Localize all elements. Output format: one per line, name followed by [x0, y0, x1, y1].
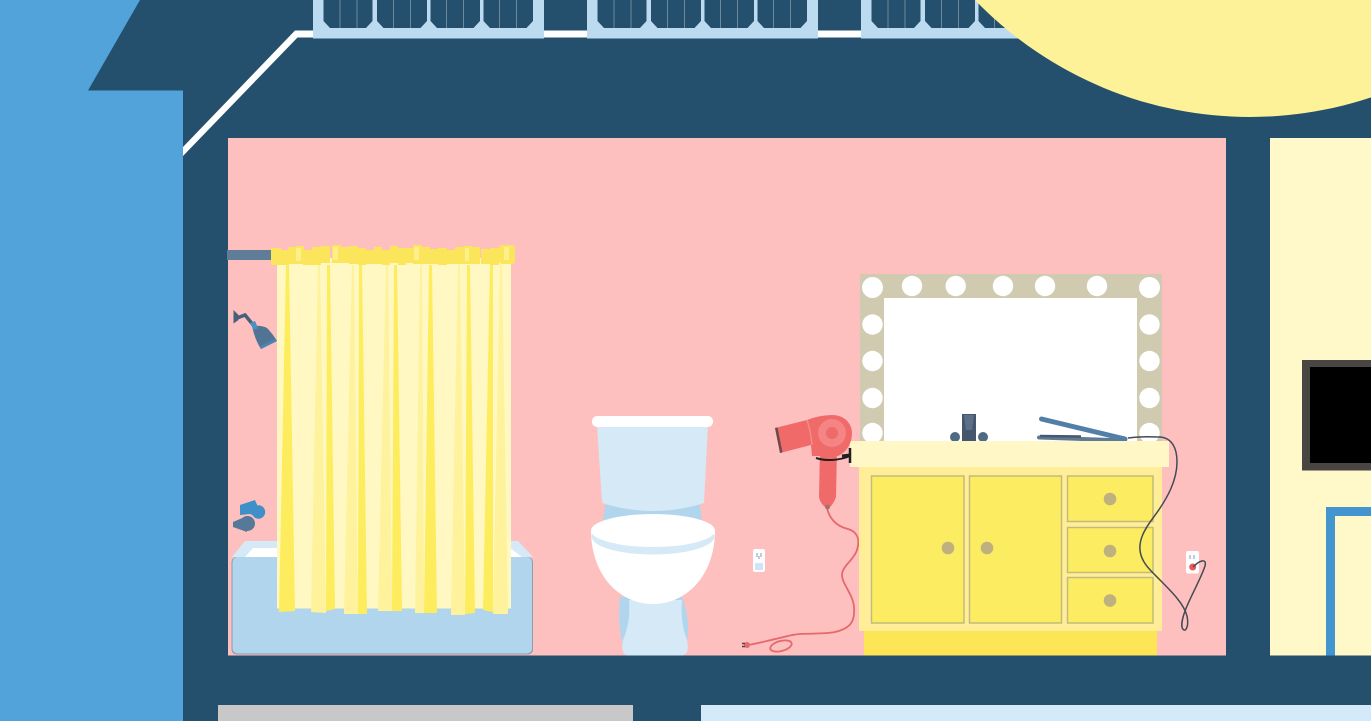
- icon: shower head: [234, 310, 277, 349]
- sky on left side: [0, 0, 183, 721]
- curtain strong folds: [279, 265, 493, 614]
- vanity mirror: [860, 274, 1162, 444]
- television: [1302, 360, 1371, 470]
- toilet tank: [597, 425, 708, 511]
- solar panels: [313, 0, 1092, 38]
- toilet base: [622, 600, 688, 656]
- dryer handle: [819, 448, 837, 507]
- dryer body and nozzle: [775, 415, 852, 456]
- cabinet toe kick: [864, 631, 1157, 656]
- solar panel 2: [587, 0, 818, 38]
- straightener cord: [1128, 437, 1205, 630]
- wall outlet left: [753, 549, 765, 572]
- dryer nozzle tip: [825, 504, 830, 510]
- curtain ruffled heading: [271, 245, 515, 265]
- floor panel: grey: [218, 705, 633, 721]
- wall outlet right: [1186, 551, 1199, 574]
- panel: adjoining room wall: [1270, 138, 1371, 656]
- panel: bathroom wall: [228, 138, 1226, 656]
- floor panel: light blue: [701, 705, 1371, 721]
- dryer nozzle opening: [775, 427, 782, 453]
- cabinet knobs: [942, 493, 1116, 607]
- solar panel 1: [313, 0, 544, 38]
- cord loop: [769, 638, 793, 654]
- hair dryer: [775, 415, 852, 510]
- mirror bulbs: [862, 276, 1160, 443]
- toilet: [591, 416, 715, 656]
- sun: [868, 0, 1371, 117]
- sink faucet: [950, 414, 988, 442]
- cabinet body: [859, 467, 1162, 631]
- shower curtain: [271, 245, 515, 615]
- solar panel 3: [861, 0, 1092, 38]
- mirror frame: [860, 274, 1162, 444]
- countertop: [850, 441, 1169, 467]
- curtain heading highlights: [296, 247, 509, 261]
- toilet neck: [603, 505, 702, 522]
- dryer vent centre: [826, 427, 838, 439]
- dryer body seam: [807, 420, 812, 445]
- bathtub: [232, 541, 533, 654]
- dryer wall holder: [816, 448, 850, 463]
- mirror glass: [884, 298, 1137, 444]
- cabinet doors and drawers: [872, 476, 1153, 623]
- toilet seat: [591, 514, 715, 547]
- white roof line: [183, 30, 1020, 156]
- hair straightener: [1039, 419, 1125, 440]
- hair dryer cord: [748, 508, 858, 654]
- toilet tank lid: [592, 416, 713, 427]
- shower rod: [227, 250, 273, 260]
- vanity cabinet: [850, 441, 1169, 656]
- toilet rim band: [592, 518, 714, 554]
- icon: cord plug: [742, 642, 750, 648]
- curtain cloth: [277, 258, 511, 608]
- curtain light folds: [311, 265, 508, 615]
- toilet base shadow: [619, 597, 688, 655]
- doorway: [1326, 507, 1371, 656]
- dryer vent ring: [818, 419, 846, 447]
- icon: bath taps: [233, 500, 265, 532]
- toilet bowl: [591, 530, 715, 604]
